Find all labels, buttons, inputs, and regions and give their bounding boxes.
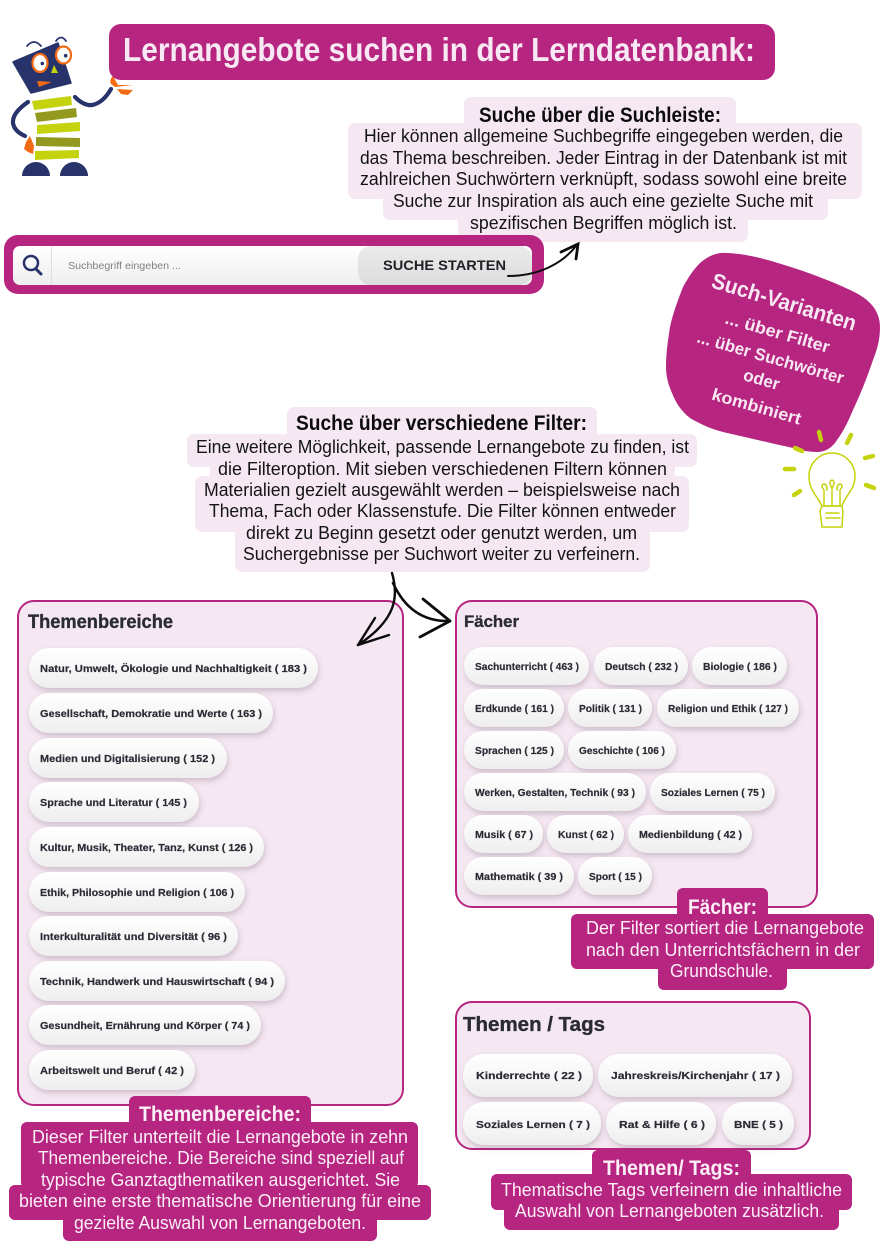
- text block: Suche über verschiedene Filter: [187, 407, 697, 572]
- callout: Such-Varianten: ... über Filter: [723, 309, 832, 357]
- filter list: Themenbereiche: Gesundheit, Ernährung und Körper ( 74 ): [40, 1020, 250, 1032]
- filter list: Fächer: Erdkunde ( 161 ): [475, 703, 554, 715]
- filter list: Fächer: Religion und Ethik ( 127 ): [668, 703, 788, 715]
- callout: Themenbereiche: typische Ganztagthematiken ausgerichtet. Sie: [41, 1170, 400, 1190]
- callout: Themen / Tags: Themen/ Tags:: [603, 1157, 740, 1180]
- filter list: Themen / Tags: Rat & Hilfe ( 6 ): [619, 1119, 705, 1131]
- callout: Fächer: nach den Unterrichtsfächern in der: [586, 940, 860, 960]
- filter list: Themenbereiche: Technik, Handwerk und Hauswirtschaft ( 94 ): [40, 976, 274, 988]
- filter list: Themen / Tags: BNE ( 5 ): [734, 1119, 783, 1131]
- robot mascot: [13, 38, 133, 176]
- panel: Fächer: Fächer: [464, 612, 519, 631]
- filter list: Fächer: Biologie ( 186 ): [703, 661, 777, 673]
- filter list: Fächer: Werken, Gestalten, Technik ( 93 ): [475, 787, 635, 799]
- text block: Suche über die Suchleiste: spezifischen Begriffen möglich ist.: [470, 213, 737, 233]
- search bar: [4, 235, 544, 294]
- callout: Themen / Tags: [491, 1150, 852, 1230]
- callout: Such-Varianten: [666, 253, 880, 452]
- filter list: Fächer: Sprachen ( 125 ): [475, 745, 554, 757]
- filter list: Fächer: [464, 647, 799, 895]
- text block: Suche über die Suchleiste: zahlreichen Suchwörtern verknüpft, sodass sowohl eine breite: [360, 169, 847, 189]
- filter list: Themenbereiche: Arbeitswelt und Beruf ( 42 ): [40, 1065, 184, 1077]
- text block: Suche über die Suchleiste: [348, 97, 862, 242]
- text block: Suche über verschiedene Filter: direkt zu Beginn gesetzt oder genutzt werden, um: [246, 523, 637, 543]
- filter list: Themenbereiche: [29, 648, 318, 1090]
- search bar: SUCHE STARTEN: [383, 257, 506, 273]
- filter list: Themen / Tags: Kinderrechte ( 22 ): [476, 1070, 582, 1082]
- arrow: search bar to text: [508, 244, 578, 276]
- callout: Themenbereiche: gezielte Auswahl von Lernangeboten.: [74, 1213, 366, 1233]
- callout: Such-Varianten: oder: [741, 366, 782, 394]
- callout: Themenbereiche: Dieser Filter unterteilt die Lernangebote in zehn: [32, 1127, 408, 1147]
- callout: Fächer: Grundschule.: [670, 961, 773, 981]
- callout: Themen / Tags: Auswahl von Lernangeboten zusätzlich.: [515, 1201, 824, 1221]
- text block: Suche über verschiedene Filter: Thema, Fach oder Klassenstufe. Die Filter können entweder: [209, 501, 676, 521]
- callout: Fächer: Fächer:: [688, 896, 757, 919]
- filter list: Fächer: Medienbildung ( 42 ): [639, 829, 742, 841]
- title: Lernangebote suchen in der Lerndatenbank:: [123, 31, 755, 68]
- filter list: Themenbereiche: Natur, Umwelt, Ökologie und Nachhaltigkeit ( 183 ): [40, 662, 307, 675]
- icon: light bulb: [785, 432, 874, 527]
- filter list: Fächer: Musik ( 67 ): [475, 829, 533, 841]
- text block: Suche über verschiedene Filter: die Filteroption. Mit sieben verschiedenen Filtern können: [218, 459, 667, 479]
- panel: Themenbereiche: Themenbereiche: [28, 612, 173, 633]
- text block: Suche über verschiedene Filter: Suchergebnisse per Suchwort weiter zu verfeinern.: [243, 544, 640, 564]
- text block: Suche über verschiedene Filter: Eine weitere Möglichkeit, passende Lernangebote zu finden, ist: [196, 437, 689, 457]
- filter list: Fächer: Mathematik ( 39 ): [475, 871, 563, 883]
- filter list: Themenbereiche: Sprache und Literatur ( 145 ): [40, 797, 187, 809]
- filter list: Fächer: Deutsch ( 232 ): [605, 661, 678, 673]
- text block: Suche über verschiedene Filter: Suche über verschiedene Filter:: [296, 412, 587, 435]
- icon: magnifier: [24, 256, 41, 274]
- callout: Themenbereiche: [9, 1096, 431, 1241]
- callout: Fächer: Der Filter sortiert die Lernangebote: [586, 918, 864, 938]
- filter list: Themenbereiche: Kultur, Musik, Theater, Tanz, Kunst ( 126 ): [40, 842, 253, 854]
- search bar: Suchbegriff eingeben ...: [68, 260, 181, 272]
- filter list: Fächer: Sport ( 15 ): [589, 871, 642, 883]
- filter list: Fächer: Geschichte ( 106 ): [579, 745, 665, 757]
- callout: Themen / Tags: Thematische Tags verfeinern die inhaltliche: [501, 1180, 842, 1200]
- filter list: Themenbereiche: Gesellschaft, Demokratie und Werte ( 163 ): [40, 708, 262, 720]
- callout: Such-Varianten: ... über Suchwörter: [695, 328, 847, 388]
- panel: Themenbereiche: [18, 601, 403, 1105]
- panel: Themen / Tags: Themen / Tags: [463, 1014, 605, 1036]
- callout: Such-Varianten: Such-Varianten: [709, 268, 860, 336]
- title: [109, 24, 775, 80]
- text block: Suche über die Suchleiste: das Thema beschreiben. Jeder Eintrag in der Datenbank ist mit: [360, 148, 847, 168]
- text block: Suche über verschiedene Filter: Materialien gezielt ausgewählt werden – beispielsweise nach: [204, 480, 680, 500]
- filter list: Themen / Tags: Jahreskreis/Kirchenjahr ( 17 ): [611, 1070, 780, 1082]
- filter list: Themenbereiche: Ethik, Philosophie und Religion ( 106 ): [40, 887, 234, 899]
- callout: Themenbereiche: Themenbereiche. Die Bereiche sind speziell auf: [38, 1148, 405, 1168]
- arrows: filter text to panels: [358, 573, 450, 645]
- filter list: Fächer: Sachunterricht ( 463 ): [475, 661, 579, 673]
- filter list: Fächer: Politik ( 131 ): [579, 703, 642, 715]
- callout: Such-Varianten: kombiniert: [710, 385, 804, 429]
- filter list: Themen / Tags: [463, 1054, 794, 1145]
- panel: Themen / Tags: [456, 1002, 810, 1149]
- text block: Suche über die Suchleiste: Suche zur Inspiration als auch eine gezielte Suche mit: [393, 191, 813, 211]
- callout: Themenbereiche: Themenbereiche:: [139, 1103, 301, 1126]
- callout: Fächer: [571, 888, 874, 990]
- filter list: Fächer: Kunst ( 62 ): [558, 829, 614, 841]
- filter list: Fächer: Soziales Lernen ( 75 ): [661, 787, 765, 799]
- text block: Suche über die Suchleiste: Hier können allgemeine Suchbegriffe eingegeben werden, die: [364, 126, 843, 146]
- panel: Fächer: [456, 601, 817, 907]
- filter list: Themen / Tags: Soziales Lernen ( 7 ): [476, 1119, 590, 1131]
- filter list: Themenbereiche: Interkulturalität und Diversität ( 96 ): [40, 931, 227, 943]
- text block: Suche über die Suchleiste: Suche über die Suchleiste:: [479, 104, 721, 127]
- callout: Themenbereiche: bieten eine erste thematische Orientierung für eine: [19, 1191, 421, 1211]
- filter list: Themenbereiche: Medien und Digitalisierung ( 152 ): [40, 753, 215, 765]
